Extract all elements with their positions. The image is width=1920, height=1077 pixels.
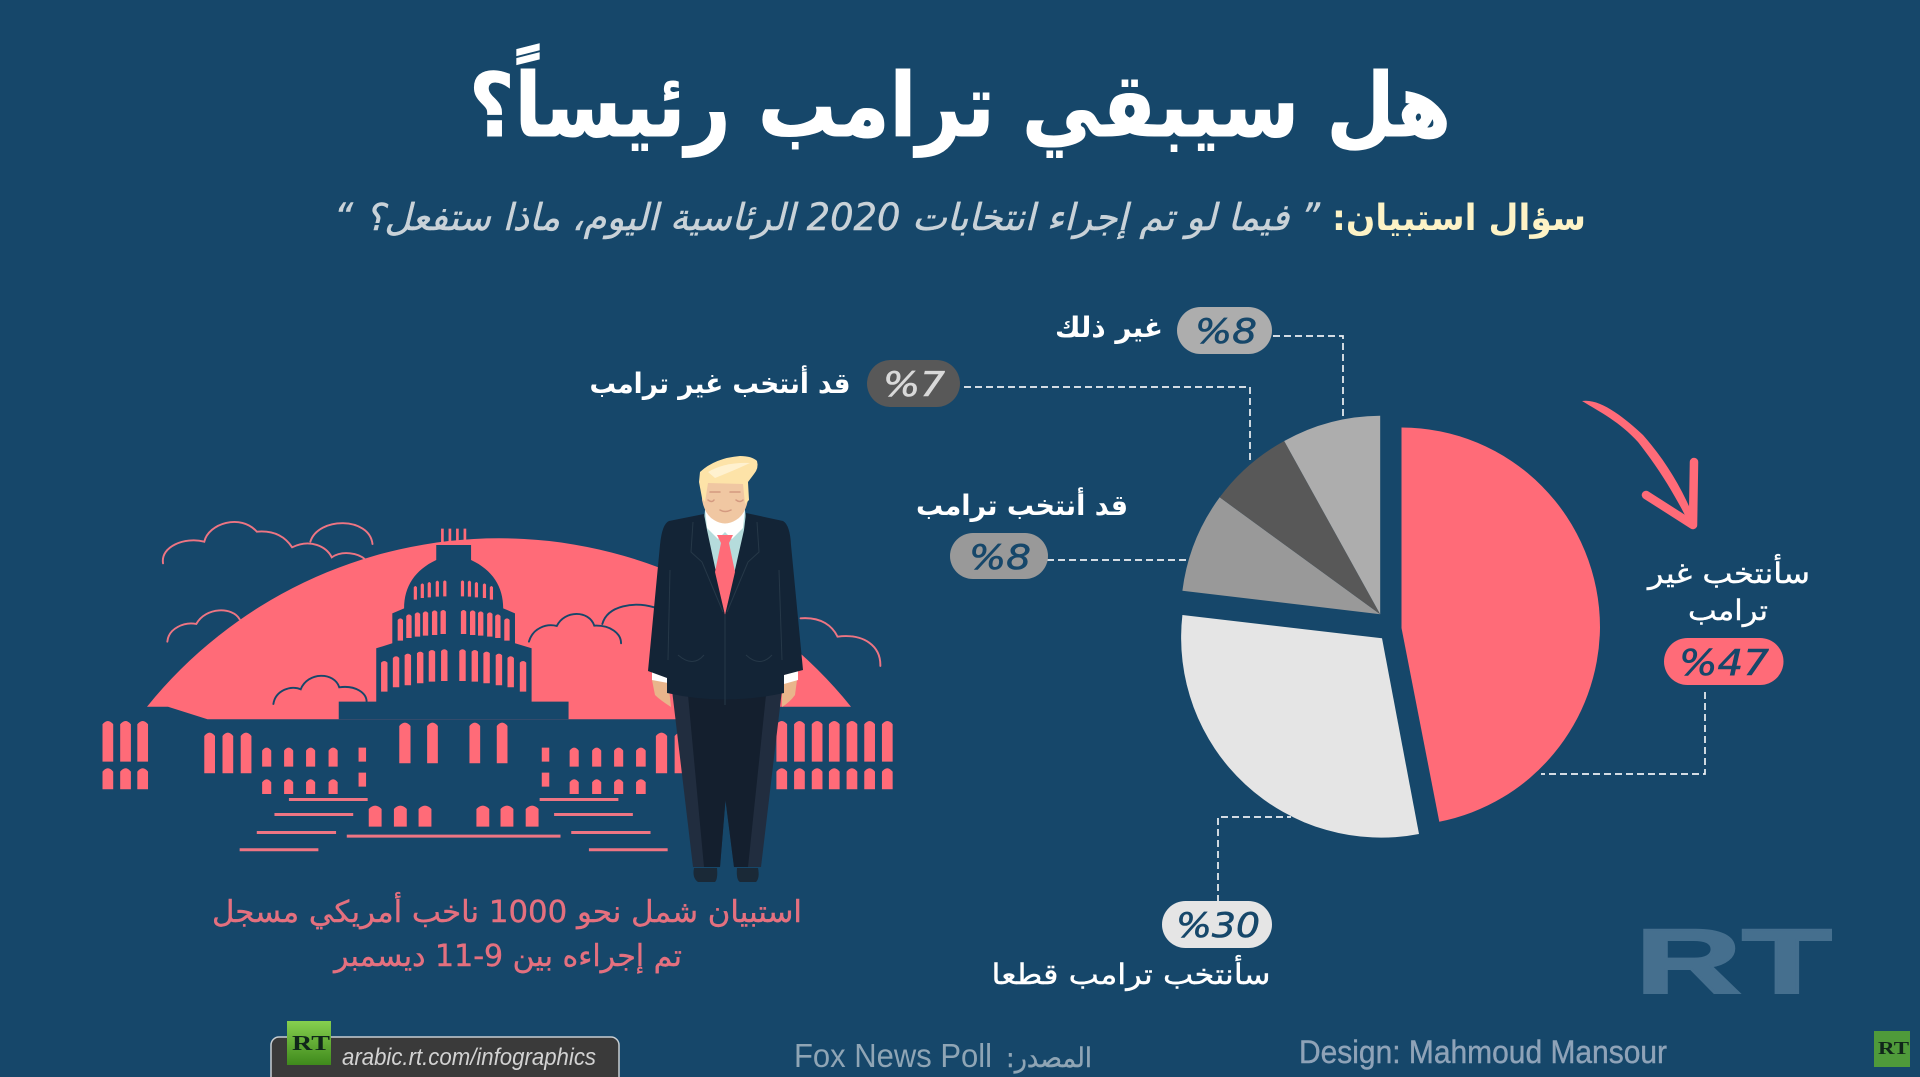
arrow (1582, 401, 1694, 525)
subtitle: survey question (334, 196, 1586, 240)
source (794, 1037, 1092, 1074)
website badge (271, 1021, 619, 1077)
jacket lapels (668, 522, 782, 705)
RT logo text: RT (292, 1031, 330, 1055)
label: will definitely elect Trump 30% (992, 901, 1272, 991)
shoes (694, 868, 759, 882)
website url: arabic.rt.com/infographics (342, 1044, 596, 1071)
left wing windows (102, 721, 366, 794)
central doors (369, 723, 539, 827)
capitol columns (381, 529, 526, 692)
RT corner logo: RT (1878, 1038, 1909, 1058)
value: %30 (1176, 906, 1260, 946)
slice: will definitely elect Trump 30% (1181, 615, 1419, 838)
badge box (271, 1037, 619, 1077)
hair highlight (708, 463, 750, 478)
source label: المصدر: (1006, 1043, 1092, 1074)
caption: قد أنتخب غير ترامب (590, 365, 850, 400)
value: %8 (1195, 312, 1257, 352)
cuffs (652, 670, 798, 684)
caption line 1: سأنتخب غير (1646, 553, 1810, 590)
trousers (672, 690, 782, 867)
slice: other 8% (1284, 416, 1380, 614)
designer credit: Design: Mahmoud Mansour (1299, 1034, 1667, 1070)
label: might elect Trump 8% (916, 487, 1128, 579)
slice: will elect someone else 47% (1402, 428, 1600, 822)
capitol silhouette (339, 545, 569, 719)
right wing windows (542, 721, 893, 794)
hands (652, 680, 797, 707)
necktie (715, 535, 735, 615)
collar (705, 508, 745, 539)
pie chart (1181, 416, 1600, 838)
pill (867, 360, 960, 407)
slice: might elect Trump 8% (1182, 497, 1380, 614)
caption line 2: ترامب (1688, 594, 1768, 627)
note line 2: تم إجراءه بين 9-11 ديسمبر (332, 939, 682, 974)
caption: غير ذلك (1055, 311, 1163, 344)
caption: سأنتخب ترامب قطعا (992, 954, 1270, 991)
person figure (648, 456, 803, 882)
title: هل سيبقي ترامب رئيساً؟ (469, 44, 1451, 158)
pill (1664, 638, 1784, 685)
pill (1177, 307, 1272, 354)
label: might elect someone else 7% (590, 360, 960, 407)
steps (240, 798, 668, 851)
survey note (212, 891, 802, 974)
jacket (648, 513, 803, 700)
value: %47 (1679, 643, 1769, 684)
source name: Fox News Poll (794, 1037, 992, 1074)
neck (707, 505, 745, 540)
slice: might elect someone else 7% (1220, 441, 1380, 614)
value: %7 (883, 365, 945, 405)
caption: قد أنتخب ترامب (916, 487, 1128, 522)
hair (699, 456, 758, 504)
subtitle question: ” فيما لو تم إجراء انتخابات 2020 الرئاسية اليوم، ماذا ستفعل؟ “ (334, 196, 1321, 240)
leader lines (964, 336, 1705, 902)
pill (1162, 901, 1272, 948)
RT watermark: RT (1635, 911, 1832, 1013)
face details (708, 492, 743, 512)
subtitle label: سؤال استبيان: (1332, 198, 1586, 239)
note line 1: استبيان شمل نحو 1000 ناخب أمريكي مسجل (212, 891, 802, 930)
trouser shading (688, 695, 766, 867)
clouds (163, 522, 880, 704)
pill (950, 533, 1048, 579)
shirt (703, 510, 747, 615)
RT corner logo (1874, 1031, 1910, 1067)
value: %8 (969, 538, 1031, 578)
capitol illustration (102, 522, 893, 851)
pink sun disc (147, 538, 851, 719)
face (702, 480, 748, 524)
label: will elect someone else 47% (1646, 553, 1810, 685)
label: other 8% (1055, 307, 1272, 354)
RT green logo (287, 1021, 331, 1065)
